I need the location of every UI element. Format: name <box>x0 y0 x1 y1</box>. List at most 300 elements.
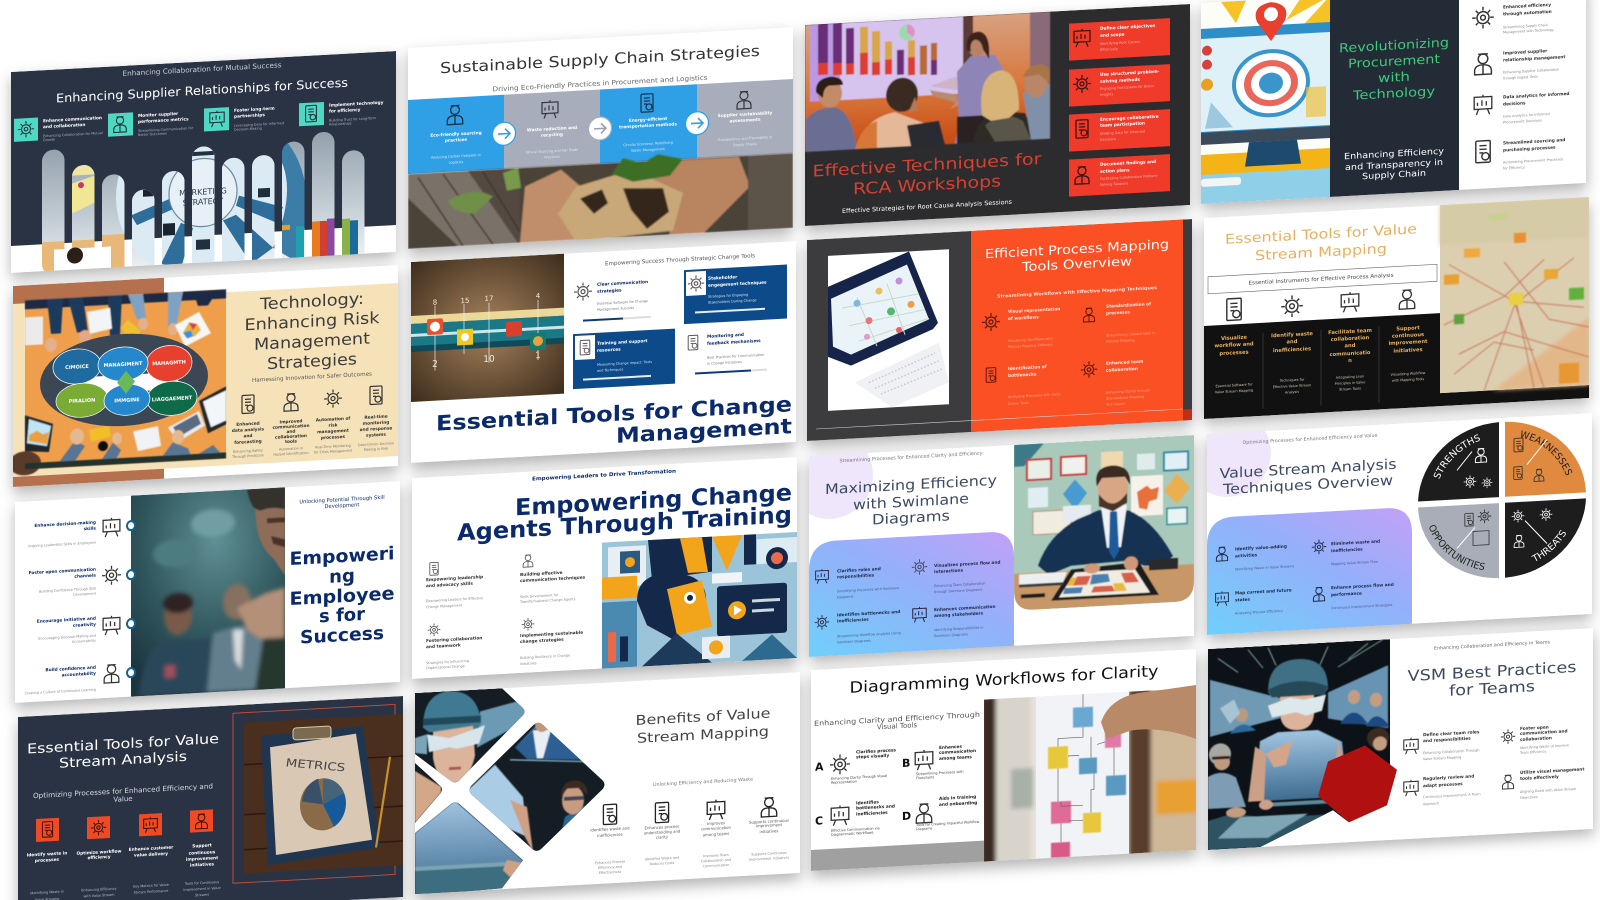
SWOT chart: THREATS <box>1531 530 1566 561</box>
benefit columns: inefficiencies <box>597 832 623 838</box>
slide: Maximizing Efficiency with Swimlane Diagrams <box>789 415 1194 658</box>
item cards row: and collaboration <box>43 122 85 130</box>
tool columns: Streams <box>195 893 209 897</box>
columns on black band: improvement <box>1389 339 1428 347</box>
columns on black band: n <box>1348 358 1352 364</box>
feature columns: and <box>243 433 253 439</box>
lettered items: and onboarding <box>939 800 977 808</box>
feature grid <box>982 301 1155 413</box>
columns on black band: and <box>1287 339 1298 345</box>
title: Maximizing Efficiency <box>825 473 997 498</box>
benefit columns: Identifies waste and <box>590 825 630 832</box>
panel items: performance <box>1331 591 1362 598</box>
title: Technology <box>1352 83 1436 103</box>
item cards row: Enhancing Collaboration for Mutual <box>43 131 103 138</box>
practice items: tools effectively <box>1520 774 1559 782</box>
change tool cards: engagement techniques <box>708 280 767 289</box>
slide: Maximizing Efficiency with Swimlane Diagrams: Streamlining Processes for Enhanced Clarity and Efficiency <box>840 451 983 464</box>
slide: Empowering Change Agents Through Training <box>412 457 797 679</box>
columns on black band: Support <box>1396 325 1420 333</box>
columns on black band: Facilitate team <box>1328 328 1372 336</box>
photo: blurred team with pointing leader <box>131 487 285 697</box>
metrics frame <box>233 704 395 883</box>
training list: communication techniques <box>520 575 586 584</box>
columns on black band: communicatio <box>1330 350 1371 358</box>
training list: Building effective <box>520 570 563 578</box>
photo: team around table diagram: LIAGGAEMENT <box>152 395 193 403</box>
lettered items: Identifies <box>856 799 879 807</box>
feature columns: Real-Time Monitoring <box>315 444 351 450</box>
panel items: Mapping Value Stream Flow <box>1331 560 1378 566</box>
photo: timeline on wood: 15 <box>461 297 469 305</box>
benefits list: through automation <box>1503 9 1552 18</box>
feature grid: Process Mapping <box>1106 338 1134 344</box>
training list: Building Resilience in Change <box>520 653 570 660</box>
practice items: Identifying Waste to Improve <box>1520 743 1569 750</box>
photo: map with sticky notes <box>1440 197 1589 393</box>
title: Value Stream Analysis <box>1219 457 1396 482</box>
slide: Empowering Employees for Success: Unlocking Potential Through Skill <box>299 495 385 506</box>
title <box>246 294 380 370</box>
feature columns: Data-Driven Decision <box>358 441 394 447</box>
slide: Efficient Process Mapping Tools: Streamlining Workflows with Effective Mapping Techniques <box>997 285 1157 300</box>
slide: Enhancing Supplier Relationships: Enhancing Collaboration for Mutual Success <box>122 61 282 78</box>
process band: Waste reduction and <box>527 125 577 134</box>
title: VSM Best Practices <box>1407 658 1577 685</box>
item cards row: performance metrics <box>138 116 189 125</box>
benefits list: Streamlining Supply Chain <box>1503 23 1548 30</box>
benefit columns: Enhances process <box>645 824 679 830</box>
lettered items: inefficiencies <box>856 810 888 818</box>
benefit columns: communication <box>701 825 732 831</box>
slide: Essential Tools for Change Management: Empowering Success Through Strategic Change Tools <box>605 253 755 267</box>
item cards row: Streamlining Communication for <box>138 126 194 133</box>
item cards row: Decision-Making <box>234 126 262 132</box>
columns on black band: inefficiencies <box>1273 346 1311 354</box>
training list: Fostering collaboration <box>426 635 482 644</box>
slide: Essential Tools for Value Stream Mapping <box>1204 197 1589 419</box>
lettered items: Enhances <box>939 744 962 751</box>
change tool cards: strategies <box>597 288 622 295</box>
process band: Reducing Carbon Footprint in <box>431 153 481 160</box>
panel items: Identifies bottlenecks and <box>837 609 900 618</box>
training list: Empowering leadership <box>426 574 483 583</box>
feature columns: Through Predictive <box>231 453 264 459</box>
change tool cards: Management Success <box>597 306 634 312</box>
benefits list: Automating Procurement Processes <box>1503 157 1564 165</box>
feature columns: data analysis <box>232 426 264 434</box>
practice items: Regularly review and <box>1423 773 1474 782</box>
columns on black band: processes <box>1219 350 1249 357</box>
change tool cards: Monitoring and <box>707 332 744 340</box>
tool columns: with Value Stream <box>84 893 115 898</box>
slide: VSM Best Practices for Teams: Enhancing Collaboration and Efficiency in Teams <box>1434 639 1551 652</box>
benefit columns <box>590 795 789 875</box>
red item cards: Insights <box>1100 92 1113 97</box>
photo: team around table diagram: MANAGIMENT <box>104 361 143 369</box>
panel items: Streamlining Workflow Analysis Using <box>837 631 901 638</box>
tool columns: value delivery <box>134 851 168 859</box>
columns on black band: with Mapping Tools <box>1392 377 1424 383</box>
title: ng <box>329 565 355 588</box>
icons row <box>1227 289 1415 321</box>
panel items: Identifying Waste in Value Streams <box>1235 564 1294 571</box>
photo: timeline on wood: 17 <box>485 295 493 303</box>
columns on black band: and <box>1345 343 1356 349</box>
photo: timeline on wood: 8 <box>433 299 437 307</box>
title: Tools Overview <box>1021 253 1132 274</box>
title: Employee <box>290 583 394 610</box>
item cards row: Implement technology <box>329 100 384 109</box>
practice items: Define clear team roles <box>1423 729 1480 738</box>
practice items: Aligning Goals with Value Stream <box>1520 787 1577 794</box>
lettered items: Tools for Creating Impactful Workflow <box>915 820 980 827</box>
pillar image: marketing strategy desk: MARKETING <box>179 186 227 198</box>
subtitle: Enhancing Efficiency <box>1344 147 1444 162</box>
red item cards: Solving Sessions <box>1100 181 1128 187</box>
red item cards: Utilizing Data for Informed <box>1100 129 1145 136</box>
title: Stream Mapping <box>637 724 769 747</box>
panel items: Continuous Improvement Strategies <box>1331 603 1393 610</box>
lettered items: Streamlining Processes with <box>916 770 964 776</box>
columns on black band <box>1214 324 1428 411</box>
title: Procurement <box>1348 51 1440 71</box>
feature columns: Improved <box>280 418 302 425</box>
lettered items: D <box>902 810 911 823</box>
feature columns: for Crisis Management <box>314 448 353 455</box>
illustration: target on monitor <box>1201 0 1330 204</box>
benefit columns: among teams <box>703 831 729 837</box>
red item cards: Document findings and <box>1100 159 1156 168</box>
slide: Effective Techniques for RCA Workshops <box>805 4 1190 226</box>
tool columns: Identify waste in <box>27 850 67 859</box>
lettered items: communication <box>939 748 976 756</box>
title: Essential Tools for Change <box>436 391 792 436</box>
panel items: Clarifies roles and <box>837 566 881 574</box>
process band: practices <box>445 137 468 144</box>
lettered items: among teams <box>939 754 972 762</box>
title <box>1220 457 1396 498</box>
change tool cards <box>573 265 787 389</box>
training list: Skills Development for <box>520 593 559 599</box>
feature columns: systems <box>366 432 386 439</box>
feature grid: Streamlining Collaboration in <box>1106 331 1155 338</box>
title: Diagramming Workflows for Clarity <box>850 662 1159 697</box>
panel items: Enhances communication <box>934 604 996 613</box>
SWOT chart: STRENGTHS <box>1434 434 1480 479</box>
title: Agents Through Training <box>457 502 792 547</box>
red item cards: team participation <box>1100 120 1145 129</box>
columns on black band: Analysis <box>1285 390 1299 395</box>
practice items: Approach <box>1423 801 1439 806</box>
practice items: Team Efficiency <box>1519 750 1546 755</box>
feature grid: Visualizing Workflows with <box>1008 337 1053 343</box>
feature columns: processes <box>321 434 346 441</box>
red item cards <box>1069 18 1170 197</box>
skill list: Accountability <box>72 639 96 644</box>
columns on black band: initiatives <box>1393 347 1423 355</box>
training list: Transformational Change Agents <box>519 597 576 604</box>
red hexagon <box>1318 744 1397 824</box>
slide: Value Stream Analysis Techniques Overview: Optimizing Processes for Enhanced Efficiency and Value <box>1242 433 1378 446</box>
title <box>1226 224 1416 260</box>
timeline nodes <box>127 521 135 677</box>
practice items: Utilize visual management <box>1520 766 1584 776</box>
panel items: Visualizes process flow and <box>934 560 1000 569</box>
tool columns: efficiency <box>87 854 111 861</box>
slide: Enhancing Supplier Relationships <box>11 51 396 290</box>
panel items: through Swimlane Diagrams <box>934 588 982 594</box>
photo: workshop presentation <box>805 12 1050 152</box>
panel items: Simplifying Processes with Swimlane <box>837 586 899 593</box>
practice items: and responsibilities <box>1423 736 1471 744</box>
feature columns: risk <box>328 422 338 429</box>
red item cards: Encourage collaborative <box>1100 114 1159 123</box>
feature columns: and response <box>360 425 392 433</box>
photo: timeline on wood <box>411 254 564 402</box>
process band: recycling <box>541 132 563 139</box>
title: Essential Tools for Value <box>27 731 219 758</box>
feature columns: Enhancing Safety <box>233 448 263 454</box>
lettered items: Enhancing Clarity Through Visual <box>831 774 887 781</box>
process band: Ethical Sourcing and Fair Trade <box>526 148 578 155</box>
skill list: Building Confidence Through Skill <box>39 587 96 594</box>
slide: Diagramming Workflows for Clarity <box>811 649 1199 876</box>
item cards row: for efficiency <box>329 107 361 115</box>
benefits list: Data analytics for informed <box>1503 91 1570 101</box>
change tool cards: Best Practices for Communication <box>707 353 764 360</box>
skill list: Encouraging Decision-Making and <box>38 634 96 641</box>
panel items <box>815 555 1000 646</box>
title <box>290 543 394 649</box>
panel items: Map current and future <box>1235 587 1292 596</box>
coffee cup <box>54 246 111 272</box>
columns on black band: Visualize <box>1221 335 1248 342</box>
feature grid: bottlenecks <box>1008 371 1037 379</box>
item cards row: Foster long-term <box>234 106 275 114</box>
training list: Strategies for Influencing <box>426 659 469 665</box>
title: Empoweri <box>290 543 394 570</box>
columns on black band: Visualizing Workflow <box>1391 371 1426 377</box>
slide: Technology Enhancing Risk Management <box>9 265 398 487</box>
feature columns: Automation in <box>279 446 303 451</box>
lettered items <box>815 743 980 838</box>
skill list: Encourage initiative and <box>37 616 96 625</box>
benefit columns: Collaboration and <box>701 858 731 863</box>
benefit columns: Identifies Waste and <box>645 856 679 861</box>
columns on black band: Stream Tools <box>1339 386 1361 392</box>
feature columns: Making in Risk <box>364 447 388 452</box>
slide: Empowering Employees for Success: Development <box>325 502 359 510</box>
feature columns: tools <box>285 439 297 445</box>
feature grid: Standardized Mapping <box>1106 395 1144 401</box>
skill list: Enhance decision-making <box>34 520 96 529</box>
feature grid: collaboration <box>1106 366 1138 374</box>
tool columns: continuous <box>189 849 216 857</box>
training list: and advocacy skills <box>426 581 473 589</box>
gradient panel <box>1207 507 1412 635</box>
title: Effective Techniques for <box>812 149 1042 181</box>
lettered items: B <box>902 757 910 770</box>
tool columns: improvement <box>186 855 218 863</box>
training list <box>426 552 586 671</box>
panel items: Identifying Responsibilities in <box>934 625 983 632</box>
tool columns: Key Metrics for Value <box>133 883 169 889</box>
item cards row: Leveraging Data for Informed <box>234 121 284 128</box>
panel items: Eliminate waste and <box>1331 539 1380 547</box>
SWOT chart: WEAKNESSES <box>1521 430 1572 476</box>
title: Enhancing Risk <box>244 308 380 334</box>
title: Empowering Change <box>515 480 792 521</box>
title: Sustainable Supply Chain Strategies <box>440 42 760 77</box>
title: Efficient Process Mapping <box>985 236 1169 261</box>
lettered items: Aids in training <box>939 794 976 802</box>
benefit columns: understanding and <box>644 829 681 836</box>
slide: Diagramming Workflows for Clarity: Visual Tools <box>877 721 918 731</box>
benefit columns: clarity <box>656 834 669 840</box>
red item cards: Effectively <box>1100 47 1118 52</box>
item cards row: Better Outcomes <box>138 131 167 137</box>
practice items: Continuous Improvement: A Team <box>1423 792 1481 799</box>
dark centre panel <box>1330 0 1459 197</box>
title: Stream Mapping <box>1255 241 1387 264</box>
skill list <box>25 517 121 695</box>
panel items: interactions <box>934 568 964 575</box>
panel items: Analyzing Process Efficiency <box>1235 609 1283 615</box>
title: Management <box>616 413 792 448</box>
benefits list: Improved supplier <box>1503 48 1548 57</box>
subtitle box: Essential Instruments for Effective Process Analysis <box>1248 273 1394 287</box>
training list: Initiatives <box>520 661 537 666</box>
title <box>457 480 792 547</box>
title <box>27 731 219 774</box>
title: for Teams <box>1449 677 1535 700</box>
feature grid: Process Mapping Software <box>1008 343 1052 349</box>
feature grid: Enhanced team <box>1106 359 1144 367</box>
change tool cards: Stakeholders During Change <box>708 298 757 305</box>
red item cards: and scope <box>1100 32 1125 39</box>
benefits list: Enhanced efficiency <box>1503 2 1551 11</box>
skill list: Development <box>73 592 97 597</box>
photo: timeline on wood: 2 <box>432 360 438 370</box>
illustration: process map on monitor <box>828 249 949 411</box>
feature columns: and <box>286 429 296 435</box>
change tool cards: Strategies for Engaging <box>708 293 748 299</box>
panel items: inefficiencies <box>1331 546 1363 554</box>
red item cards: action plans <box>1100 167 1130 175</box>
columns on black band: continuous <box>1392 332 1424 340</box>
process band: transportation methods <box>619 121 677 130</box>
item cards row: Building Trust for Long-Term <box>329 116 377 123</box>
feature columns: monitoring <box>363 419 389 427</box>
practice items: Foster open <box>1520 724 1549 732</box>
columns on black band: Techniques for <box>1279 378 1305 383</box>
red item cards: Decisions <box>1100 137 1116 142</box>
subtitle <box>1344 148 1444 180</box>
slide: Technology Enhancing Risk Management: Harnessing Innovation for Safer Outcomes <box>252 371 372 384</box>
skill list: skills <box>84 526 96 532</box>
red item cards: solving methods <box>1100 77 1140 85</box>
item cards row: Enhance communication <box>43 115 102 124</box>
title: s for <box>319 604 365 627</box>
slide: Sustainable Supply Chain Strategies: Driving Eco-Friendly Practices in Procurement and Logistics <box>492 74 708 93</box>
photo: team around table diagram: CIMOICE <box>65 364 89 371</box>
process band <box>408 79 793 174</box>
change tool cards: Stakeholder <box>708 274 738 282</box>
benefits list: relationship management <box>1503 54 1565 64</box>
benefit columns: Improves Team <box>703 853 730 858</box>
benefit columns: Supports Continuous <box>751 851 787 857</box>
photo: metrics clipboard: METRICS <box>285 756 346 774</box>
slide: Revolutionizing Procurement with Technology <box>1201 0 1586 204</box>
panel items: Enhancing Team Collaboration <box>934 581 985 588</box>
benefit columns: improvement <box>756 822 783 828</box>
feature columns: Hazard Identification <box>273 451 309 457</box>
photo: timeline on wood: 10 <box>483 354 495 365</box>
SWOT chart <box>1418 422 1586 578</box>
skill list: Build confidence and <box>45 665 96 673</box>
feature grid: of workflows <box>1008 314 1039 322</box>
photo: team around table diagram: PIRALION <box>69 398 95 405</box>
photo: team around table diagram <box>9 289 226 476</box>
process band: Logistics <box>449 160 464 165</box>
tool columns: Identifying Waste in <box>30 890 64 895</box>
subtitle: and Transparency in <box>1345 158 1443 173</box>
panel items: Swimlane Diagrams <box>837 639 871 644</box>
red item cards: Use structured problem- <box>1100 69 1160 78</box>
practice items: Value Stream Mapping <box>1423 755 1461 761</box>
tool columns: initiatives <box>190 861 215 869</box>
red item cards: Engaging Participants for Better <box>1100 84 1155 91</box>
panel items <box>1216 536 1394 617</box>
title <box>1408 658 1577 702</box>
benefit columns: Enhances Process <box>595 860 625 865</box>
columns on black band: Identify waste <box>1271 331 1313 339</box>
item cards row: Monitor supplier <box>138 111 179 119</box>
columns on black band: workflow and <box>1214 341 1254 349</box>
subtitle box <box>1208 264 1437 294</box>
slide: Empowering Employees for Success <box>15 481 400 703</box>
change tool cards: Essential Software for Change <box>597 299 648 306</box>
photo: visor operator and control room <box>1208 639 1390 850</box>
title: Strategies <box>267 349 357 373</box>
photo: team around table diagram: IMMGINE <box>114 397 140 404</box>
title <box>986 240 1168 271</box>
slide: Essential Tools for Value Stream Analysis: Value <box>113 795 133 804</box>
title: Revolutionizing <box>1339 34 1449 55</box>
title: Techniques Overview <box>1222 473 1393 498</box>
item cards row <box>14 99 384 144</box>
change tool cards: Clear communication <box>597 279 648 288</box>
feature grid: Standardization of <box>1106 301 1151 310</box>
panel items: Swimlane Diagrams <box>934 632 968 638</box>
panel items: responsibilities <box>837 572 875 580</box>
slide: Benefits of Value Stream Mapping <box>415 672 800 898</box>
feature grid: Driven Tools <box>1008 401 1029 406</box>
feature columns: Automation of <box>316 416 350 424</box>
tool columns: Stream Performance <box>134 889 168 895</box>
feature columns: Enhanced <box>236 421 260 428</box>
process band: Supply Chains <box>733 142 757 147</box>
change tool cards: in Change Initiatives <box>707 360 742 366</box>
title <box>438 400 792 443</box>
slide: Diagramming Workflows for Clarity: Enhancing Clarity and Efficiency Through <box>814 711 980 728</box>
process band: Supplier sustainability <box>718 110 773 119</box>
photo: consultant at table <box>1014 435 1194 611</box>
skill list: Creating a Culture of Continuous Learning <box>25 688 96 695</box>
tool columns: Enhancing Efficiency <box>81 887 117 893</box>
skill list: channels <box>74 573 96 580</box>
